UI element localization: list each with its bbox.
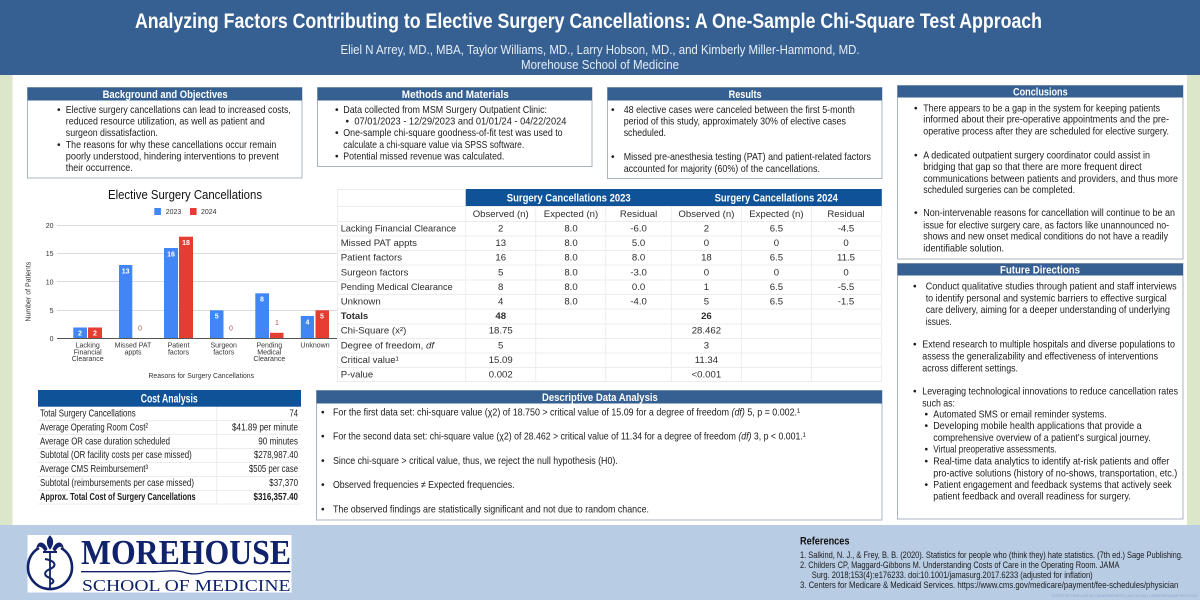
- text: conclusions bullets: informed about their pre-operative appointments and the pre-: [923, 114, 1169, 126]
- table values 2023: 0.002: [489, 370, 513, 380]
- chart legend: 2023: [166, 209, 181, 216]
- text: results bullets: period of this study, approximately 30% of elective cases: [624, 117, 846, 128]
- table values 2023: 48: [495, 311, 507, 322]
- table values 2024: 0: [843, 238, 849, 249]
- cost row values: $37,370: [269, 478, 298, 489]
- text: background bullets: reduced resource utilization, as well as patient and: [66, 117, 265, 128]
- logo: Morehouse School of Medicine: [28, 533, 292, 595]
- heading: methods and materials: Methods and Materials: [402, 89, 509, 101]
- table values 2024: 26: [701, 311, 712, 322]
- table values 2024: 1: [704, 282, 709, 293]
- text: future directions bullets: Virtual preoperative assessments.: [933, 444, 1057, 455]
- category labels: Financial: [74, 349, 102, 356]
- panel: methods and materials: [318, 88, 592, 166]
- data labels: 13: [122, 268, 130, 276]
- cost row labels: Average CMS Reimbursement³: [40, 464, 148, 475]
- table values 2023: 5: [498, 267, 503, 278]
- authors: Eliel N Arrey, MD., MBA, Taylor Williams, MD., Larry Hobson, MD., and Kimberly Miller-Hammond, MD.: [340, 42, 860, 57]
- text: background bullets: Elective surgery cancellations can lead to increased costs,: [66, 105, 291, 116]
- text: results bullets: •: [611, 105, 615, 116]
- table values 2024: 0: [774, 238, 779, 249]
- table values 2023: 8.0: [564, 282, 578, 293]
- text: conclusions bullets: •: [914, 103, 918, 114]
- table values 2024: 6.5: [770, 296, 783, 308]
- category labels: Patient: [168, 342, 189, 350]
- table row labels: P-value: [341, 370, 373, 380]
- category labels: Medical: [257, 349, 282, 356]
- y axis tick labels: 0: [50, 336, 54, 343]
- text: background bullets: •: [57, 105, 61, 116]
- category labels: Unknown: [300, 342, 330, 350]
- table values 2024: 0: [704, 238, 709, 249]
- category labels: factors: [213, 349, 235, 356]
- cost row labels: Average Operating Room Cost²: [40, 422, 148, 434]
- table values 2023: 16: [495, 253, 506, 264]
- cost row labels: [40, 409, 196, 503]
- table values 2024: 28.462: [692, 326, 721, 337]
- table values 2023: 8.0: [632, 253, 645, 264]
- text: background bullets: surgeon dissatisfaction.: [66, 128, 158, 139]
- table values 2024: 18: [701, 253, 712, 264]
- table sub headers: [473, 209, 865, 220]
- heading: future directions: Future Directions: [1000, 264, 1080, 276]
- text: conclusions bullets: operative process after they are scheduled for elective surgery.: [923, 127, 1169, 138]
- data labels: 16: [167, 252, 175, 258]
- data labels: 2: [78, 330, 82, 338]
- text: future directions bullets: across different settings.: [922, 363, 1018, 374]
- text: future directions bullets: •: [913, 282, 917, 293]
- text: future directions bullets: Developing mobile health applications that provide a: [933, 421, 1142, 432]
- table values 2024: 0: [843, 267, 849, 278]
- text: future directions bullets: Conduct qualitative studies through patient and staff interviews: [926, 282, 1177, 293]
- text: conclusions bullets: •: [914, 208, 918, 219]
- text: methods bullets: Potential missed revenue was calculated.: [343, 152, 504, 163]
- table values 2023: [489, 224, 647, 380]
- text: descriptive bullets: For the second data set: chi-square value (χ2) of 28.462 > critical value of 11.34 for a degree of freedom (df) 3, p < 0.001.¹: [333, 432, 806, 443]
- text: methods bullets: [335, 105, 567, 163]
- table values 2023: 2: [498, 224, 503, 234]
- table values 2023: 15.09: [489, 355, 513, 366]
- text: methods bullets: Data collected from MSM Surgery Outpatient Clinic:: [343, 105, 547, 116]
- category labels: appts: [124, 349, 142, 356]
- table values 2024: <0.001: [692, 370, 721, 380]
- text: descriptive bullets: Since chi-square > critical value, thus, we reject the null hypothesis (H0).: [333, 456, 618, 467]
- text: descriptive bullets: The observed findings are statistically significant and not due to random chance.: [333, 504, 649, 515]
- category labels: Surgeon: [210, 342, 237, 350]
- table values 2024: 6.5: [770, 282, 783, 293]
- cost row values: $316,357.40: [254, 492, 298, 503]
- table values 2023: 8.0: [564, 238, 578, 249]
- text: future directions bullets: [913, 282, 1178, 503]
- x axis title: Reasons for Surgery Cancellations: [148, 373, 254, 380]
- text: future directions bullets: •: [924, 421, 928, 432]
- category labels: Pending: [256, 342, 282, 350]
- cost row labels: Subtotal (OR facility costs per case missed): [40, 450, 192, 461]
- category labels: [72, 342, 330, 363]
- text: methods bullets: •: [346, 117, 350, 128]
- title: Analyzing Factors Contributing to Elective Surgery Cancellations: A One-Sample Chi-Square Test Approach: [135, 10, 1042, 33]
- text: descriptive bullets: Observed frequencies ≠ Expected frequencies.: [333, 480, 515, 491]
- category labels: Missed PAT: [115, 342, 152, 350]
- table values 2024: 6.5: [770, 253, 783, 264]
- table values 2023: 8.0: [564, 253, 578, 264]
- table sub headers: Expected (n): [749, 209, 804, 220]
- references: References: [800, 536, 850, 548]
- text: conclusions bullets: •: [914, 150, 918, 161]
- text: methods bullets: •: [335, 105, 339, 116]
- text: background bullets: their occurrence.: [66, 163, 133, 174]
- table values 2023: 13: [495, 238, 506, 249]
- panel: descriptive data analysis: [316, 390, 882, 520]
- category labels: factors: [168, 349, 189, 356]
- text: future directions bullets: •: [924, 444, 928, 455]
- table values 2024: -4.5: [838, 224, 854, 234]
- text: methods bullets: calculate a chi-square value via SPSS software.: [343, 140, 524, 151]
- panel: cost analysis table: [38, 390, 301, 504]
- table values 2023: 8.0: [564, 296, 578, 308]
- table values 2024: 2: [704, 224, 709, 234]
- text: conclusions bullets: [914, 103, 1178, 254]
- text: future directions bullets: to identify personal and systemic barriers to effective surgical: [926, 293, 1167, 304]
- text: future directions bullets: •: [924, 480, 928, 491]
- affiliation: Morehouse School of Medicine: [521, 57, 679, 72]
- heading: cost analysis: Cost Analysis: [141, 394, 198, 406]
- text: background bullets: •: [57, 140, 61, 151]
- table row labels: Surgeon factors: [341, 267, 409, 278]
- table column group headers: [507, 192, 839, 204]
- table sub headers: Residual: [620, 209, 657, 220]
- cost row values: $505 per case: [249, 464, 298, 475]
- text: methods bullets: One-sample chi-square goodness-of-fit test was used to: [343, 128, 563, 139]
- data labels: 1: [275, 320, 279, 327]
- text: future directions bullets: •: [924, 410, 928, 421]
- category labels: Lacking: [76, 342, 100, 350]
- table row labels: Pending Medical Clearance: [341, 282, 453, 293]
- chart legend: 2024: [201, 209, 217, 216]
- table column group headers: Surgery Cancellations 2023: [507, 192, 631, 204]
- table row labels: Totals: [341, 311, 368, 322]
- heading: background and objectives: Background and Objectives: [103, 89, 228, 101]
- cost row labels: Subtotal (reimbursements per case missed): [40, 478, 194, 489]
- text: conclusions bullets: scheduled surgeries can be completed.: [923, 185, 1075, 196]
- text: results bullets: •: [611, 152, 615, 163]
- table values 2023: 8: [498, 282, 503, 293]
- cost row labels: Total Surgery Cancellations: [40, 409, 136, 420]
- footer band: [0, 525, 1200, 600]
- text: future directions bullets: comprehensive overview of a patient’s surgical journey.: [933, 433, 1151, 444]
- text: results bullets: scheduled.: [624, 128, 666, 139]
- text: background bullets: The reasons for why these cancellations occur remain: [66, 140, 276, 151]
- text: future directions bullets: care delivery, aiming for a deeper understanding of underlying: [926, 305, 1170, 316]
- text: descriptive bullets: For the first data set: chi-square value (χ2) of 18.750 > critical value of 15.09 for a degree of freedom (df) 5, p = 0.002.¹: [333, 407, 801, 418]
- heading: descriptive data analysis: Descriptive Data Analysis: [542, 392, 658, 404]
- cost row labels: Approx. Total Cost of Surgery Cancellations: [40, 492, 196, 503]
- table values 2024: 3: [704, 340, 709, 351]
- text: future directions bullets: •: [924, 456, 928, 467]
- text: future directions bullets: Automated SMS or email reminder systems.: [933, 410, 1107, 421]
- table values 2024: 0: [774, 267, 779, 278]
- table values 2023: 5: [498, 340, 503, 351]
- category labels: Clearance: [253, 356, 285, 363]
- data labels: 5: [215, 314, 219, 320]
- table row labels: Critical value¹: [341, 355, 399, 366]
- cost row values: 90 minutes: [258, 436, 298, 447]
- text: future directions bullets: patient feedback and overall readiness for surgery.: [933, 492, 1131, 503]
- table sub headers: Observed (n): [473, 209, 529, 220]
- panel: background and objectives: [28, 88, 302, 178]
- template credit: © POSTER TEMPLATE BY GENIGRAPHICS® | 800.790.4001 | WWW.GENIGRAPHICS.COM: [1052, 594, 1197, 598]
- table values 2024: [692, 224, 855, 380]
- references: Surg. 2018;153(4):e176233. doi:10.1001/jamasurg.2017.6233 (adjusted for inflation): [812, 570, 1093, 580]
- table values 2024: 0: [704, 267, 709, 278]
- table row labels: [341, 224, 456, 380]
- data labels: 0: [229, 326, 233, 332]
- cost row labels: Average OR case duration scheduled: [40, 436, 170, 447]
- text: descriptive bullets: •: [321, 480, 325, 491]
- text: descriptive bullets: •: [321, 456, 325, 467]
- heading: conclusions: Conclusions: [1013, 86, 1068, 98]
- table sub headers: Expected (n): [544, 209, 598, 220]
- text: results bullets: 48 elective cases were canceled between the first 5-month: [624, 105, 855, 116]
- text: conclusions bullets: identifiable solution.: [923, 243, 1004, 254]
- table values 2023: 8.0: [564, 224, 578, 234]
- panel: future directions: [898, 264, 1183, 519]
- chart legend: [154, 208, 217, 216]
- data labels: 0: [138, 326, 142, 332]
- heading: results: Results: [729, 89, 762, 101]
- references: 2. Childers CP, Maggard-Gibbons M. Understanding Costs of Care in the Operating Room. JAMA: [800, 560, 1120, 570]
- table values 2023: -6.0: [630, 224, 647, 234]
- text: methods bullets: 07/01/2023 - 12/29/2023 and 01/01/24 - 04/22/2024: [354, 117, 567, 128]
- text: descriptive bullets: •: [321, 504, 325, 515]
- table column group headers: Surgery Cancellations 2024: [715, 192, 839, 204]
- text: background bullets: [57, 105, 291, 174]
- table values 2023: 8.0: [564, 267, 578, 278]
- table values 2024: -1.5: [838, 296, 854, 308]
- text: conclusions bullets: bridging that gap so that there are more frequent direct: [923, 162, 1142, 173]
- bars 2024: [88, 237, 329, 338]
- text: descriptive bullets: •: [321, 432, 325, 443]
- data labels: 2: [93, 330, 97, 338]
- y axis title: Number of Patients: [26, 261, 32, 322]
- bars 2023: [73, 248, 314, 338]
- y axis tick labels: 5: [50, 308, 54, 315]
- table values 2024: 5: [704, 296, 709, 308]
- text: descriptive bullets: •: [321, 407, 325, 418]
- data labels: 4: [306, 320, 310, 326]
- text: future directions bullets: assess the generalizability and effectiveness of interventions: [922, 352, 1158, 363]
- data labels: 5: [320, 314, 324, 320]
- text: results bullets: Missed pre-anesthesia testing (PAT) and patient-related factors: [624, 152, 871, 163]
- text: future directions bullets: •: [913, 386, 917, 397]
- data labels: 18: [182, 240, 190, 247]
- category labels: Clearance: [72, 356, 104, 363]
- bar chart: elective surgery cancellations: [26, 188, 337, 380]
- text: future directions bullets: •: [913, 340, 917, 351]
- icon: caduceus emblem: [28, 536, 72, 589]
- text: background bullets: poorly understood, hindering interventions to prevent: [66, 152, 279, 163]
- y axis tick labels: [46, 223, 54, 343]
- table row labels: Patient factors: [341, 253, 402, 264]
- y axis tick labels: 10: [46, 280, 54, 286]
- text: results bullets: [611, 105, 871, 175]
- table values 2024: 11.5: [837, 253, 855, 264]
- table sub headers: Residual: [827, 209, 865, 220]
- wordmark: Morehouse: MOREHOUSE: [81, 533, 291, 572]
- table sub headers: Observed (n): [678, 209, 734, 220]
- data labels: [78, 240, 324, 338]
- y axis tick labels: 15: [46, 251, 54, 258]
- text: future directions bullets: issues.: [926, 317, 952, 328]
- wordmark: School of Medicine: SCHOOL OF MEDICINE: [82, 576, 290, 595]
- table values 2023: 5.0: [632, 238, 645, 249]
- table row labels: Chi-Square (x²): [341, 326, 406, 337]
- text: descriptive bullets: [321, 407, 806, 515]
- chart title: Elective Surgery Cancellations: [108, 188, 262, 202]
- panel: conclusions: [898, 86, 1183, 259]
- cost row values: $41.89 per minute: [232, 422, 298, 434]
- table values 2024: 11.34: [695, 355, 719, 366]
- cost row values: $278,987.40: [254, 450, 298, 461]
- panel: results: [608, 88, 882, 178]
- table values 2023: -4.0: [630, 296, 647, 308]
- references: [800, 536, 1183, 590]
- data labels: 8: [260, 296, 264, 304]
- text: conclusions bullets: shows and new onset medical conditions do not have a readily: [923, 232, 1169, 243]
- table values 2024: 6.5: [770, 224, 783, 234]
- text: conclusions bullets: There appears to be a gap in the system for keeping patients: [923, 103, 1160, 114]
- text: future directions bullets: Real-time data analytics to identify at-risk patients and offer: [933, 456, 1170, 467]
- text: methods bullets: •: [335, 152, 339, 163]
- cost row values: 74: [290, 409, 298, 420]
- table row labels: Unknown: [341, 296, 381, 308]
- header banner: [0, 0, 1200, 75]
- table: chi-square results: [337, 189, 882, 382]
- text: future directions bullets: such as:: [922, 398, 955, 409]
- table row labels: Lacking Financial Clearance: [341, 224, 456, 234]
- text: conclusions bullets: A dedicated outpatient surgery coordinator could assist in: [923, 150, 1150, 161]
- text: results bullets: accounted for majority (60%) of the cancellations.: [624, 164, 820, 175]
- table values 2023: 18.75: [489, 326, 513, 337]
- text: methods bullets: •: [335, 128, 339, 139]
- table row labels: Degree of freedom, df: [341, 340, 435, 351]
- table row labels: Missed PAT appts: [341, 238, 417, 249]
- table values 2023: -3.0: [630, 267, 647, 278]
- table values 2023: 4: [498, 296, 504, 308]
- cost row values: [232, 409, 298, 503]
- table values 2023: 0.0: [632, 282, 645, 293]
- y axis tick labels: 20: [46, 223, 54, 230]
- table values 2024: -5.5: [838, 282, 854, 293]
